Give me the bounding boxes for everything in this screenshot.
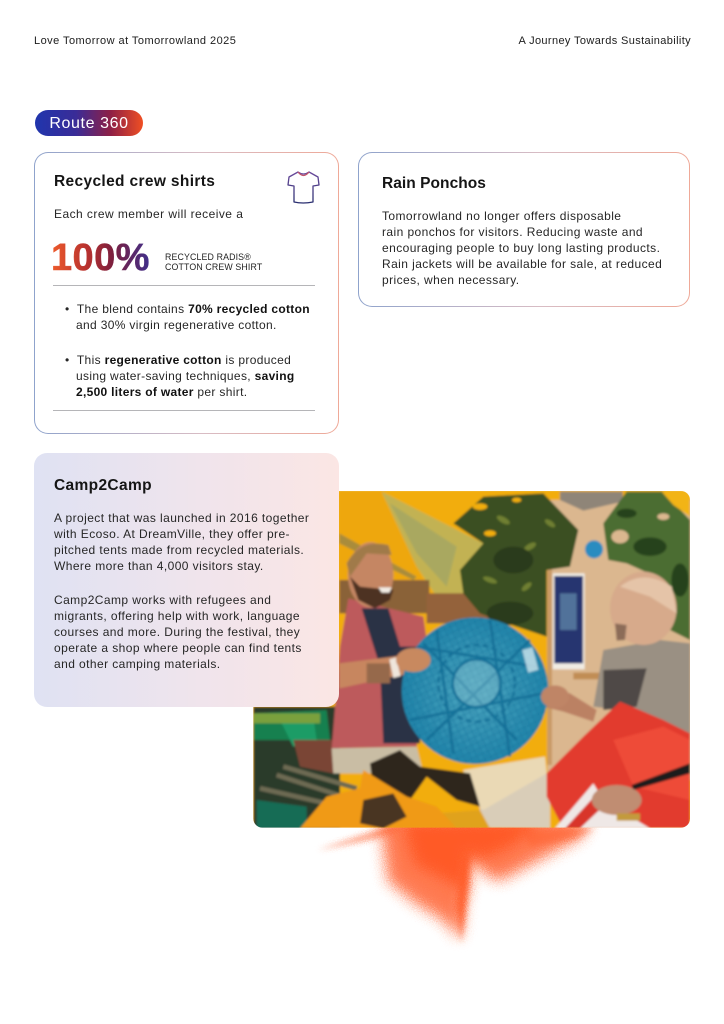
stat label: COTTON CREW SHIRT <box>165 262 262 272</box>
bullet: regenerative cotton: 2,500 liters of water per shirt. <box>76 385 247 399</box>
section tag: Route 360 <box>35 110 143 136</box>
man right: arm <box>546 692 597 722</box>
camp2camp second paragraph: operate a shop where people can find tents <box>54 641 302 655</box>
intro text: Each crew member will receive a <box>54 207 243 221</box>
left plant <box>453 493 578 637</box>
camp2camp intro paragraph: pitched tents made from recycled materials. <box>54 543 304 557</box>
man left: head <box>348 542 393 608</box>
camp2camp intro paragraph: with Ecoso. At DreamVille, they offer pre- <box>54 527 290 541</box>
bullet: regenerative cotton: • This regenerative cotton is produced <box>65 353 291 367</box>
panel: recycled crew shirts <box>34 152 339 434</box>
camp2camp second paragraph: courses and more. During the festival, they <box>54 625 300 639</box>
photo: two people holding a round packed tent in a camp shop <box>253 491 690 828</box>
orange cloth on table <box>300 770 457 828</box>
stat label <box>165 252 262 272</box>
bullet: blend: • The blend contains 70% recycled cotton <box>65 302 310 316</box>
camp2camp intro paragraph <box>54 511 309 573</box>
heading: recycled crew shirts: Recycled crew shirts <box>54 173 215 190</box>
bullet: regenerative cotton <box>65 353 294 399</box>
rain ponchos text: prices, when necessary. <box>382 273 520 287</box>
camp2camp second paragraph: and other camping materials. <box>54 657 221 671</box>
bullet: regenerative cotton: using water-saving techniques, saving <box>76 369 294 383</box>
rain ponchos text: Tomorrowland no longer offers disposable <box>382 209 621 223</box>
man right: shirt <box>592 639 690 734</box>
rain ponchos text: encouraging people to buy long lasting products. <box>382 241 660 255</box>
camp2camp intro paragraph: Where more than 4,000 visitors stay. <box>54 559 264 573</box>
red jacket <box>547 702 690 828</box>
wood wall <box>547 500 700 780</box>
camp2camp second paragraph: Camp2Camp works with refugees and <box>54 593 271 607</box>
section tag: Route 360: Route 360 <box>49 115 129 132</box>
big stat: 100%: 100% <box>51 237 150 279</box>
paint spray under photo <box>320 828 599 947</box>
stat label: RECYCLED RADIS® <box>165 252 251 262</box>
blue paper flower <box>585 540 603 558</box>
rain ponchos text: Rain jackets will be available for sale, at reduced <box>382 257 662 271</box>
camp2camp second paragraph: migrants, offering help with work, language <box>54 609 300 623</box>
man left: vest and torso <box>332 598 427 748</box>
bullet: blend: and 30% virgin regenerative cotton. <box>76 318 277 332</box>
bottom-left goods <box>253 707 340 830</box>
man right: head <box>610 572 677 645</box>
right plant <box>603 492 690 640</box>
rain ponchos text: rain ponchos for visitors. Reducing waste and <box>382 225 643 239</box>
icon: t-shirt <box>287 171 320 204</box>
table <box>480 773 550 828</box>
dark cloth on table <box>370 750 480 807</box>
left hand on ball <box>396 648 431 672</box>
bullet: blend <box>65 302 310 332</box>
heading: camp2camp: Camp2Camp <box>54 477 152 494</box>
panel: rain ponchos <box>358 152 690 307</box>
rain ponchos text <box>382 209 662 287</box>
ball <box>402 617 548 764</box>
poster <box>553 573 585 669</box>
heading: rain ponchos: Rain Ponchos <box>382 175 486 192</box>
background tent <box>250 490 700 830</box>
man left: arm and hand <box>339 654 406 689</box>
header left: document title: Love Tomorrow at Tomorrowland 2025 <box>34 35 236 47</box>
panel: camp2camp <box>34 453 339 707</box>
header right: document subtitle: A Journey Towards Sustainability <box>519 35 691 47</box>
camp2camp second paragraph <box>54 593 302 671</box>
right hand on ball <box>541 685 569 708</box>
camp2camp intro paragraph: A project that was launched in 2016 together <box>54 511 309 525</box>
